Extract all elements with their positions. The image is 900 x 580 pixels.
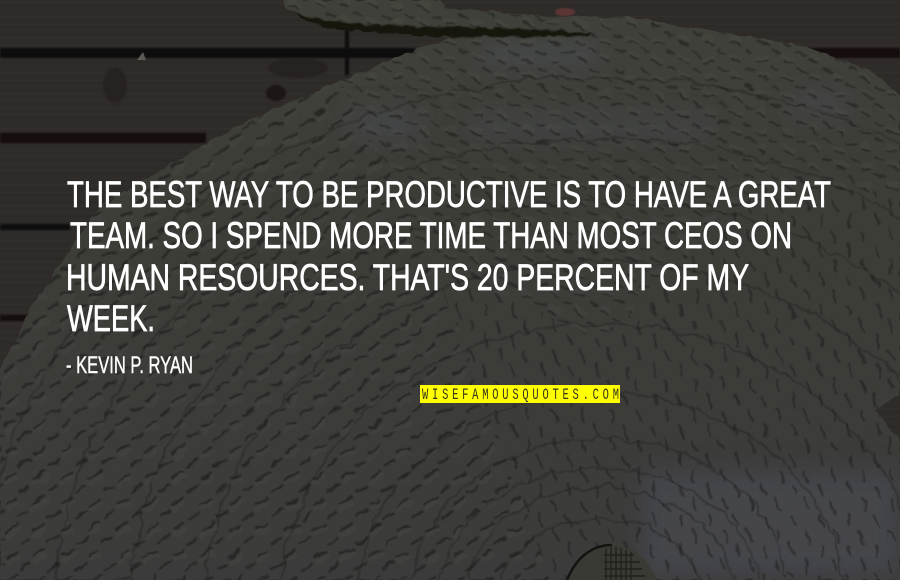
quote line 4: WEEK. [67, 298, 155, 339]
website badge: WISEFAMOUSQUOTES.COM [422, 387, 619, 405]
quote text [66, 174, 831, 339]
shadow under top coil [285, 10, 590, 37]
author attribution: - KEVIN P. RYAN [66, 352, 193, 379]
blue-grey rope highlights [350, 42, 900, 578]
rope centre [567, 545, 656, 580]
